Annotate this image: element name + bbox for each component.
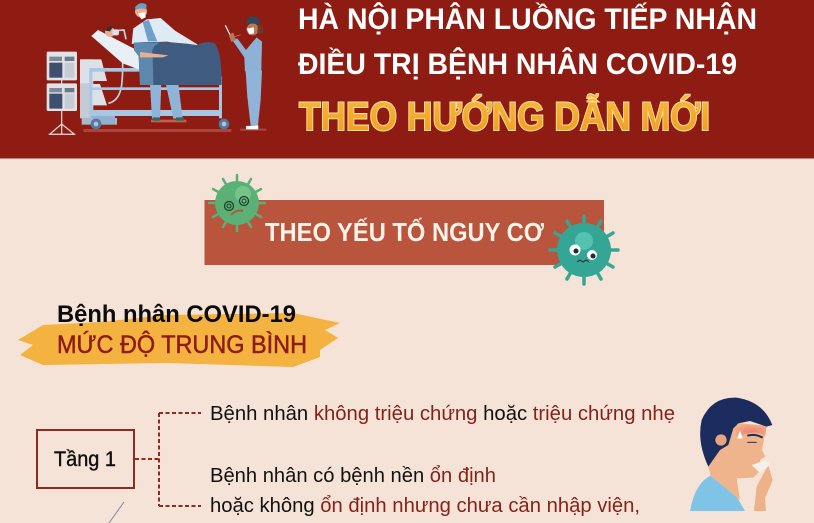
ventilator machine	[80, 59, 123, 125]
severity heading	[18, 301, 340, 367]
patient	[91, 26, 140, 70]
heading line 1: Bệnh nhân COVID-19	[57, 301, 296, 328]
section banner	[204, 200, 604, 265]
title	[298, 2, 757, 139]
title line 2: ĐIỀU TRỊ BỆNH NHÂN COVID-19	[298, 47, 737, 81]
connector lines	[135, 413, 201, 506]
icon: teal virus with worried face	[550, 216, 618, 284]
icon: green virus with spiral eyes	[209, 175, 265, 231]
monitors	[47, 52, 77, 111]
icon: pencil line	[109, 502, 124, 523]
blanket	[134, 42, 222, 85]
title line 1: HÀ NỘI PHÂN LUỒNG TIẾP NHẬN	[298, 2, 757, 36]
heading line 2: MỨC ĐỘ TRUNG BÌNH	[57, 330, 307, 359]
IV stand	[49, 78, 75, 134]
brush stroke	[18, 313, 340, 367]
tier label: Tầng 1	[54, 448, 116, 471]
icon: coughing man	[690, 398, 773, 511]
doctor	[132, 3, 199, 122]
criterion text 2: hoặc không ổn định nhưng chưa cần nhập viện,	[210, 495, 640, 517]
header band	[0, 0, 814, 158]
nurse	[225, 17, 264, 129]
criterion text 1: Bệnh nhân không triệu chứng hoặc triệu chứng nhẹ	[210, 403, 675, 425]
bed frame	[89, 68, 229, 129]
criterion text 2	[210, 465, 640, 517]
banner text: THEO YẾU TỐ NGUY CƠ	[265, 217, 545, 247]
title line 3: THEO HƯỚNG DẪN MỚI	[299, 93, 710, 139]
criterion text 2: Bệnh nhân có bệnh nền ổn định	[210, 465, 496, 487]
tier box	[37, 430, 134, 488]
illustration: hospital bed with doctor and nurse	[47, 3, 267, 134]
floor shadow	[83, 129, 267, 132]
